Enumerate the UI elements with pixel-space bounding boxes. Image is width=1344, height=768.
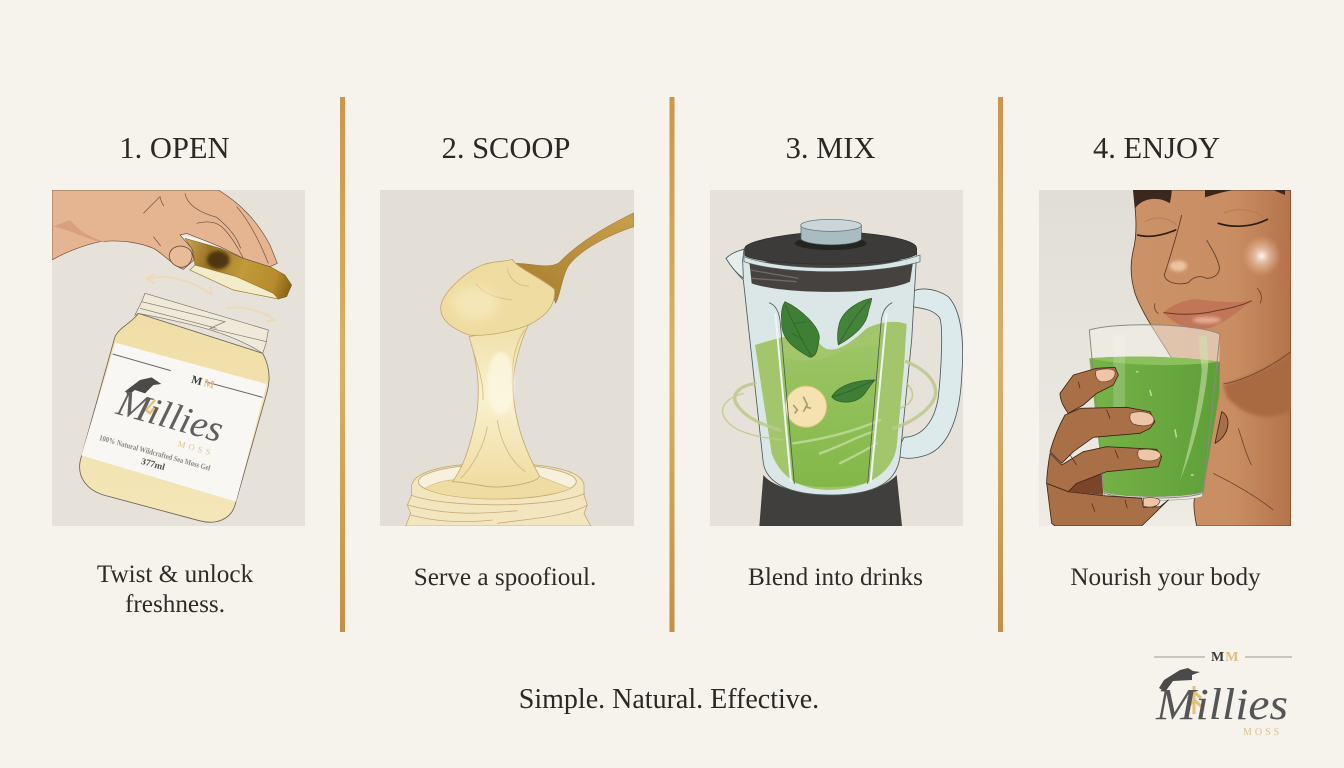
panel: enjoy illustration xyxy=(1039,190,1291,526)
jar of gel xyxy=(80,293,269,522)
middle finger xyxy=(1050,407,1155,463)
hand xyxy=(52,190,277,269)
blender jar xyxy=(726,249,917,495)
nose xyxy=(1164,215,1219,284)
caption: enjoy: Nourish your body xyxy=(1070,564,1261,591)
swirl motion lines xyxy=(723,362,936,440)
closed eyes xyxy=(1138,219,1267,236)
gold lid xyxy=(180,235,292,299)
logo hand xyxy=(1159,668,1200,692)
panel: open illustration xyxy=(52,190,305,526)
spinach leaf left xyxy=(781,302,819,357)
jar body xyxy=(80,313,269,522)
caption: scoop: Serve a spoofioul. xyxy=(414,564,596,591)
heading: 3. MIX: 3. MIX xyxy=(786,131,875,165)
heading: 4. ENJOY: 4. ENJOY xyxy=(1093,131,1220,165)
icon: twist arrows xyxy=(147,274,275,321)
eyebrows xyxy=(1133,190,1285,208)
heading: 1. OPEN: 1. OPEN xyxy=(119,131,230,165)
far thumb xyxy=(1215,412,1228,443)
caption: open: freshness. xyxy=(125,591,225,618)
gold spoon xyxy=(516,213,634,303)
panel: scoop illustration xyxy=(380,190,634,526)
blender baffles xyxy=(769,303,892,484)
jar rim with gel xyxy=(406,463,591,526)
divider 3 xyxy=(998,97,1003,632)
lips xyxy=(1163,299,1252,329)
panel: mix illustration xyxy=(710,190,963,526)
bubbles xyxy=(1137,372,1193,475)
spinach leaf right xyxy=(837,298,872,345)
ring finger xyxy=(1047,447,1162,492)
logo subtitle: MOSS xyxy=(1243,727,1282,738)
jar label: 100% Natural Wildcrafted Sea Moss Gel xyxy=(98,433,212,473)
spout xyxy=(726,249,744,278)
blender collar xyxy=(749,260,913,292)
blender lid xyxy=(745,232,917,264)
blender base xyxy=(759,475,902,526)
neck shadow xyxy=(1223,352,1291,417)
blender handle xyxy=(896,289,963,458)
spinach leaf small xyxy=(832,380,875,402)
caption: mix: Blend into drinks xyxy=(748,564,923,591)
logo monogram: MM xyxy=(1211,650,1238,665)
divider 2 xyxy=(670,97,674,632)
brand logo xyxy=(1154,650,1292,738)
divider 1 xyxy=(340,97,345,632)
jar label xyxy=(81,343,267,502)
jar label: MOSS xyxy=(177,439,215,458)
jar label: 377ml xyxy=(140,457,166,473)
jar label: M xyxy=(202,377,216,392)
logo rules xyxy=(1154,656,1292,658)
jar label: Millies xyxy=(111,382,228,451)
thumb nail xyxy=(169,246,192,267)
fingernails xyxy=(1096,369,1161,507)
palm xyxy=(1047,483,1168,526)
stretching gel xyxy=(441,259,555,487)
jar neck glass xyxy=(135,293,268,353)
lid cap xyxy=(795,219,867,250)
face and neck xyxy=(1131,190,1291,526)
shadow under finger xyxy=(1068,473,1103,495)
index finger xyxy=(1060,367,1118,413)
smoothie xyxy=(755,322,907,490)
glass of green juice xyxy=(1089,325,1220,500)
cheek highlight xyxy=(1242,235,1281,277)
tagline: Simple. Natural. Effective. xyxy=(519,684,819,715)
banana slice xyxy=(785,386,827,427)
jar label: M xyxy=(190,374,204,388)
logo sprig xyxy=(1188,686,1201,714)
knuckle creases xyxy=(1070,382,1127,512)
logo wordmark: Millies xyxy=(1155,680,1288,729)
hand holding glass xyxy=(1047,367,1228,526)
heading: 2. SCOOP: 2. SCOOP xyxy=(442,131,570,165)
caption: open: Twist & unlock xyxy=(97,561,253,588)
blending streaks xyxy=(793,420,880,463)
